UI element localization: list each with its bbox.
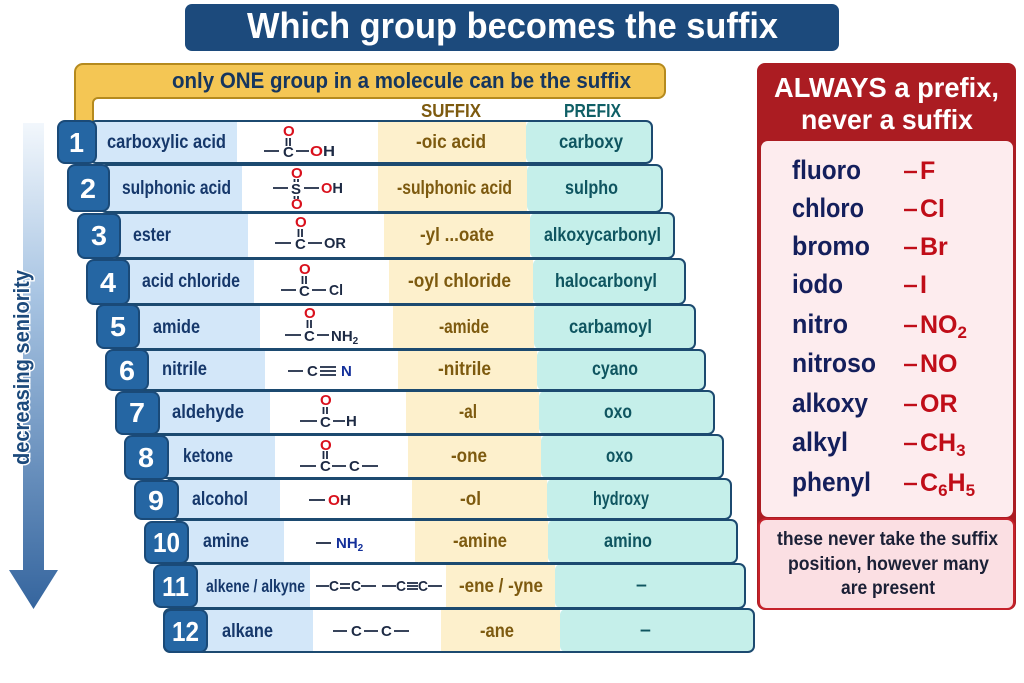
row 1: carboxylic acid: OH bbox=[310, 143, 335, 160]
row 12: alkane: 12 bbox=[172, 616, 199, 647]
row 4: acid chloride: C bbox=[299, 283, 310, 300]
prefix list panel bbox=[761, 141, 1013, 517]
panel heading: never a suffix bbox=[801, 104, 973, 135]
row 12: alkane: -ane bbox=[480, 620, 514, 642]
row 4: acid chloride bbox=[87, 259, 685, 304]
row 7: aldehyde: aldehyde bbox=[172, 401, 244, 423]
row 11: alkene / alkyne: 11 bbox=[162, 571, 189, 602]
row 8: ketone: C bbox=[349, 458, 360, 475]
prefix list: H bbox=[948, 469, 966, 497]
row 3: ester bbox=[78, 213, 674, 258]
prefix list: phenyl bbox=[792, 467, 871, 497]
row 3: ester: alkoxycarbonyl bbox=[544, 224, 661, 246]
row 8: ketone: ketone bbox=[183, 445, 233, 467]
row 6: nitrile: C bbox=[307, 363, 318, 380]
prefix list: NO bbox=[920, 350, 958, 378]
row 5: amide: C bbox=[304, 328, 315, 345]
row 7: aldehyde: 7 bbox=[129, 397, 145, 428]
row 11: alkene / alkyne: -ene / -yne bbox=[459, 575, 543, 597]
row 8: ketone: 8 bbox=[138, 442, 154, 473]
row 6: nitrile bbox=[106, 350, 705, 390]
row 5: amide: amide bbox=[153, 316, 200, 338]
row 1: carboxylic acid: -oic acid bbox=[416, 131, 486, 153]
row 5: amide: 5 bbox=[110, 311, 126, 342]
row 1: carboxylic acid: O bbox=[283, 123, 295, 140]
column heading: suffix: SUFFIX bbox=[421, 101, 481, 121]
row 10: amine: amino bbox=[604, 530, 652, 552]
row 11: alkene / alkyne bbox=[154, 564, 745, 608]
prefix list: Br bbox=[920, 233, 948, 261]
row 6: nitrile: 6 bbox=[119, 355, 135, 386]
row 7: aldehyde: C bbox=[320, 414, 331, 431]
row 12: alkane: C bbox=[381, 623, 392, 640]
row 4: acid chloride: Cl bbox=[329, 282, 343, 299]
row 4: acid chloride: -oyl chloride bbox=[408, 270, 511, 292]
row 2: sulphonic acid: sulpho bbox=[565, 177, 618, 199]
row 4: acid chloride: O bbox=[299, 261, 311, 278]
row 5: amide: NH bbox=[331, 328, 353, 345]
row 4: acid chloride: acid chloride bbox=[142, 270, 240, 292]
row 2: sulphonic acid: OH bbox=[321, 180, 343, 197]
row 11: alkene / alkyne: C bbox=[329, 578, 339, 595]
prefix list: 2 bbox=[958, 323, 967, 342]
callout: never the suffix: are present bbox=[841, 577, 935, 599]
column heading: prefix: PREFIX bbox=[564, 101, 621, 121]
row 10: amine: 2 bbox=[358, 543, 364, 554]
callout: never the suffix: these never take the suffix bbox=[777, 528, 998, 550]
row 8: ketone: -one bbox=[451, 445, 487, 467]
row 8: ketone: O bbox=[320, 437, 332, 454]
prefix list: CH bbox=[920, 429, 956, 457]
row 10: amine: 10 bbox=[153, 527, 180, 558]
row 11: alkene / alkyne: alkene / alkyne bbox=[206, 576, 305, 596]
prefix list: I bbox=[920, 271, 927, 299]
row 1: carboxylic acid: 1 bbox=[69, 127, 84, 158]
row 2: sulphonic acid: sulphonic acid bbox=[122, 177, 231, 199]
prefix list: alkoxy bbox=[792, 388, 868, 418]
prefix list: nitroso bbox=[792, 348, 876, 378]
row 11: alkene / alkyne: C bbox=[351, 578, 361, 595]
row 9: alcohol: hydroxy bbox=[593, 488, 649, 510]
row 12: alkane bbox=[164, 609, 754, 652]
prefix list: OR bbox=[920, 390, 958, 418]
row 5: amide bbox=[97, 305, 695, 349]
row 4: acid chloride: halocarbonyl bbox=[555, 270, 657, 292]
prefix list: chloro bbox=[792, 193, 864, 223]
row 2: sulphonic acid: -sulphonic acid bbox=[397, 177, 512, 199]
panel: always a prefix bbox=[757, 63, 1016, 610]
banner: only one group: only ONE group in a molecule can be the suffix bbox=[172, 68, 632, 93]
row 7: aldehyde bbox=[116, 391, 714, 434]
row 11: alkene / alkyne: – bbox=[636, 574, 647, 596]
row 2: sulphonic acid bbox=[68, 165, 662, 213]
row 8: ketone: C bbox=[320, 458, 331, 475]
arrow: decreasing seniority bbox=[9, 123, 58, 609]
panel heading: ALWAYS a prefix, bbox=[774, 72, 999, 103]
row 8: ketone bbox=[125, 435, 723, 479]
prefix list: iodo bbox=[792, 269, 843, 299]
row 2: sulphonic acid: O bbox=[291, 196, 303, 213]
row 7: aldehyde: O bbox=[320, 392, 332, 409]
row 1: carboxylic acid: C bbox=[283, 144, 294, 161]
row 5: amide: 2 bbox=[353, 336, 359, 347]
row 3: ester: O bbox=[295, 214, 307, 231]
row 9: alcohol: alcohol bbox=[192, 488, 248, 510]
row 1: carboxylic acid: carboxylic acid bbox=[107, 131, 226, 153]
row 9: alcohol: -ol bbox=[460, 488, 481, 510]
row 8: ketone: oxo bbox=[606, 445, 633, 467]
row 5: amide: carbamoyl bbox=[569, 316, 652, 338]
row 9: alcohol: OH bbox=[328, 492, 351, 509]
prefix list: nitro bbox=[792, 309, 848, 339]
prefix list: fluoro bbox=[792, 155, 861, 185]
row 7: aldehyde: oxo bbox=[604, 401, 632, 423]
row 3: ester: -yl ...oate bbox=[420, 224, 494, 246]
row 6: nitrile: cyano bbox=[592, 358, 638, 380]
row 12: alkane: C bbox=[351, 623, 362, 640]
row 10: amine: -amine bbox=[453, 530, 507, 552]
callout: never the suffix: position, however many bbox=[788, 553, 989, 575]
row 7: aldehyde: -al bbox=[459, 401, 477, 423]
row 2: sulphonic acid: O bbox=[291, 165, 303, 182]
prefix list: C bbox=[920, 469, 938, 497]
prefix list: 6 bbox=[938, 481, 948, 500]
row 2: sulphonic acid: 2 bbox=[80, 173, 96, 204]
row 12: alkane: alkane bbox=[222, 620, 273, 642]
row 6: nitrile: nitrile bbox=[162, 358, 207, 380]
callout: never the suffix bbox=[759, 519, 1014, 609]
row 10: amine bbox=[145, 520, 737, 563]
prefix list: alkyl bbox=[792, 427, 848, 457]
row 7: aldehyde: H bbox=[346, 413, 357, 430]
arrow: decreasing seniority: decreasing seniority bbox=[9, 269, 34, 465]
prefix list: 3 bbox=[956, 441, 966, 460]
row 3: ester: ester bbox=[133, 224, 171, 246]
row 1: carboxylic acid bbox=[58, 121, 652, 163]
row 5: amide: -amide bbox=[439, 316, 489, 338]
row 9: alcohol bbox=[135, 479, 731, 519]
prefix list: Cl bbox=[920, 195, 945, 223]
row 11: alkene / alkyne: C bbox=[396, 578, 406, 595]
prefix list: F bbox=[920, 157, 935, 185]
row 6: nitrile: N bbox=[341, 363, 352, 380]
row 2: sulphonic acid: S bbox=[291, 181, 301, 198]
row 3: ester: 3 bbox=[91, 220, 107, 251]
prefix list: 5 bbox=[966, 481, 975, 500]
row 5: amide: O bbox=[304, 305, 316, 322]
row 6: nitrile: -nitrile bbox=[438, 358, 491, 380]
row 1: carboxylic acid: carboxy bbox=[559, 131, 623, 153]
row 11: alkene / alkyne: C bbox=[418, 578, 428, 595]
row 10: amine: amine bbox=[203, 530, 249, 552]
row 10: amine: NH bbox=[336, 535, 358, 552]
title: Which group becomes the suffix bbox=[247, 5, 778, 46]
panel heading bbox=[774, 72, 999, 135]
prefix list: NO bbox=[920, 311, 958, 339]
row 12: alkane: – bbox=[640, 619, 651, 641]
row 9: alcohol: 9 bbox=[148, 485, 164, 516]
row 3: ester: OR bbox=[324, 235, 346, 252]
row 3: ester: C bbox=[295, 236, 306, 253]
prefix list bbox=[792, 155, 975, 500]
prefix list: bromo bbox=[792, 231, 870, 261]
row 4: acid chloride: 4 bbox=[100, 267, 116, 298]
banner: only one group bbox=[75, 64, 665, 122]
